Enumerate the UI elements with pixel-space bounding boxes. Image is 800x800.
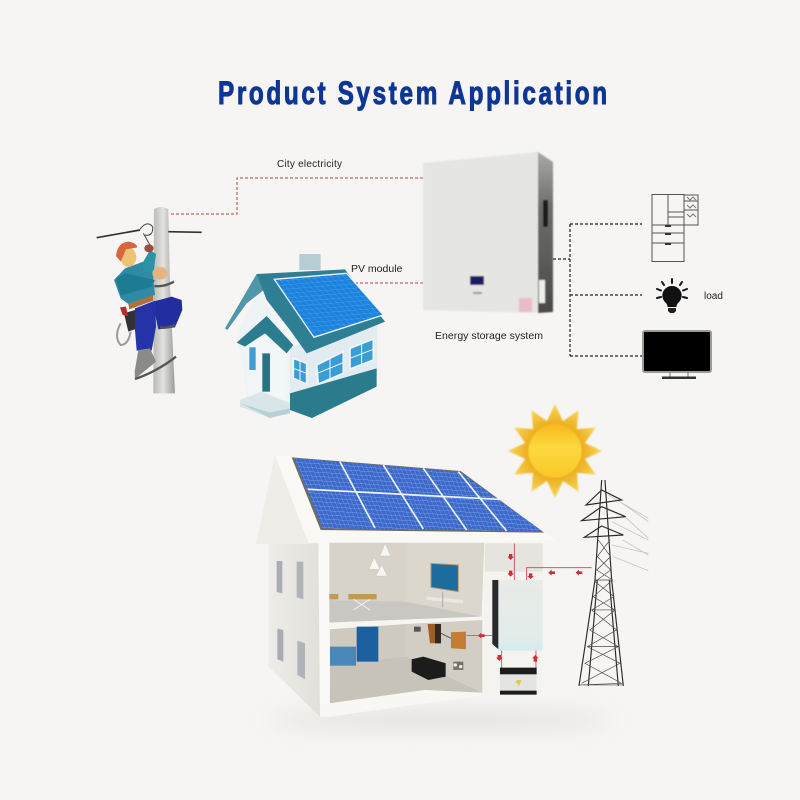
chimney [299,254,321,270]
icon: electrician [114,242,182,379]
floor battery [412,657,446,680]
dining table [329,594,377,599]
roof white band [275,455,556,543]
sun rays [508,404,602,498]
icon: distribution cabinet [652,194,698,262]
upper floor [329,600,482,623]
icon: house with solar roof [225,254,385,418]
left leg [135,301,156,351]
red flow arrows [478,554,582,662]
tower lattice [579,540,623,685]
floor slab [329,617,482,629]
boot [135,348,156,379]
label: load: load [704,291,723,302]
roof frame [292,457,544,533]
meters [453,662,463,670]
connector: city electricity dashed line [171,178,424,214]
label: city electricity: City electricity [277,159,342,170]
icon: light bulb [657,279,687,313]
main roof [257,269,385,353]
title: Product System Application [218,76,607,112]
blue cabinets [357,627,378,662]
inverter dark side [492,580,500,651]
icon: utility pole [97,207,202,393]
solar panel [274,273,383,337]
hard hat [116,242,137,262]
door [262,353,270,392]
face [120,248,136,267]
tower legs [579,480,623,686]
panel dividers [308,462,512,531]
label: energy storage system: Energy storage system [435,330,543,342]
right wall [484,543,543,693]
logo [473,292,482,294]
power lines [608,495,648,571]
battery side [538,152,553,313]
wall tv [431,563,458,592]
bottom slab [320,690,485,717]
pink sticker [519,298,532,312]
front section edge [318,543,329,717]
ground shadow [270,710,610,730]
icon: monitor [643,331,711,379]
battery unit [500,668,537,693]
left gable band [225,274,277,330]
pendant lamps [369,543,391,576]
tool coil [117,323,131,345]
side label [539,280,545,303]
gable wall [256,455,320,717]
windows [317,352,343,384]
illustration: cutaway solar house [256,455,592,717]
inverter front [498,580,543,651]
raised arm [143,250,156,273]
lower floor [330,657,482,703]
connector: load dashed lines [553,224,644,356]
icon: sun [508,404,602,498]
steps [240,392,290,418]
wiring [467,543,592,668]
hands [152,267,168,280]
connector: PV module dashed line [355,282,423,284]
upper room right wall [407,543,484,617]
skirting [290,368,377,418]
pole straps [135,282,176,379]
lower room right wall [407,620,482,693]
front wall [237,290,293,403]
solar array [294,458,543,531]
left wall windows [277,561,282,593]
side slot [543,200,548,227]
sun disc [528,424,582,478]
label: PV module: PV module [351,263,403,275]
pouch [124,310,137,332]
porch wall [247,333,287,400]
icon: wall-mounted energy storage battery [423,152,553,313]
upper room back wall [329,543,407,602]
wall inverter boxes [428,624,441,643]
right leg [153,297,182,329]
porch window [249,347,256,370]
side wall [290,323,377,407]
belt [128,295,153,309]
porch gable [237,316,293,353]
torso [114,257,155,304]
lcd display [470,276,484,285]
battery front [423,152,538,313]
sleeve [116,273,155,296]
illustration: transmission tower [579,480,648,686]
tower cross-arms [582,490,626,537]
lower room back wall [330,624,407,667]
